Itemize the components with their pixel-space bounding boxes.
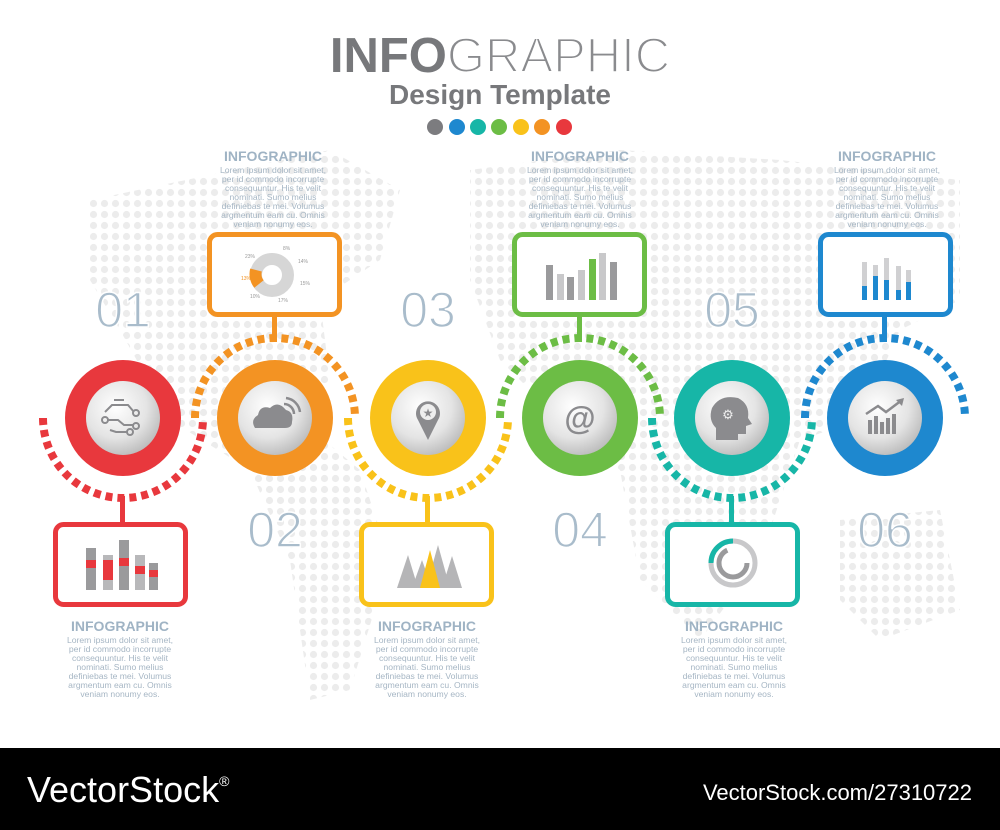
box 02: donut chart <box>210 234 340 314</box>
text block 06: nominati. Sumo melius <box>844 192 930 202</box>
text block 01: veniam nonumy eos. <box>80 689 160 699</box>
box 04: bar chart <box>514 234 644 314</box>
text block 02: consequuntur. His te velit <box>225 183 322 193</box>
text block 06: veniam nonumy eos. <box>847 219 927 229</box>
text block 02: definiebas te mei. Volumus <box>222 201 324 211</box>
step 01 <box>43 282 203 604</box>
icon: cloud <box>253 404 292 428</box>
text block 02 <box>220 148 326 229</box>
text block 03: per id commodo incorrupte <box>376 644 478 654</box>
icon: head with gears <box>711 397 752 440</box>
text block 01: nominati. Sumo melius <box>77 662 163 672</box>
title: INFOGRAPHIC <box>330 29 670 83</box>
text block 02: per id commodo incorrupte <box>222 174 324 184</box>
text block 03: consequuntur. His te velit <box>379 653 476 663</box>
box 02: donut chart: 23% <box>245 254 256 260</box>
icon: location star <box>416 401 440 440</box>
box 01: bar chart <box>56 524 186 604</box>
text block 04: INFOGRAPHIC <box>531 148 629 164</box>
step 03: ★ <box>423 406 433 420</box>
text block 05: argmentum eam cu. Omnis <box>682 680 786 690</box>
box 02: donut chart: 14% <box>298 259 309 265</box>
text block 02: veniam nonumy eos. <box>233 219 313 229</box>
text block 04: argmentum eam cu. Omnis <box>528 210 632 220</box>
number 03: 03 <box>400 282 456 338</box>
text block 04 <box>527 148 633 229</box>
text block 03: Lorem ipsum dolor sit amet, <box>374 635 480 645</box>
text block 01: INFOGRAPHIC <box>71 618 169 634</box>
box 02: donut chart: 15% <box>300 281 311 287</box>
circle 05 <box>674 360 790 476</box>
circle 03 <box>370 360 486 476</box>
text block 05 <box>681 618 787 699</box>
text block 05: per id commodo incorrupte <box>683 644 785 654</box>
number 02: 02 <box>247 502 303 558</box>
box 03: mountain chart <box>362 524 492 604</box>
step 03 <box>348 282 508 604</box>
circle 04 <box>522 360 638 476</box>
footer bar: VectorStock.com/27310722 <box>703 780 972 805</box>
circle 02 <box>217 360 333 476</box>
number 06: 06 <box>857 502 913 558</box>
text block 06: INFOGRAPHIC <box>838 148 936 164</box>
text block 05: Lorem ipsum dolor sit amet, <box>681 635 787 645</box>
text block 02: argmentum eam cu. Omnis <box>221 210 325 220</box>
circle 01 <box>65 360 181 476</box>
dashed arc 03 <box>348 418 508 498</box>
dashed arc 02 <box>195 338 355 418</box>
icon: circuit <box>102 400 139 435</box>
step 05 <box>652 282 812 699</box>
number 04: 04 <box>552 502 608 558</box>
text block 02: Lorem ipsum dolor sit amet, <box>220 165 326 175</box>
text block 01: consequuntur. His te velit <box>72 653 169 663</box>
text block 06: Lorem ipsum dolor sit amet, <box>834 165 940 175</box>
text block 03: nominati. Sumo melius <box>384 662 470 672</box>
text block 06: definiebas te mei. Volumus <box>836 201 938 211</box>
footer bar: ® <box>219 773 230 789</box>
icon: growth chart <box>868 414 896 434</box>
icon: at sign: @ <box>564 400 596 436</box>
step 06 <box>805 148 965 558</box>
text block 03: veniam nonumy eos. <box>387 689 467 699</box>
dashed arc 05 <box>652 418 812 498</box>
subtitle: Design Template <box>389 79 611 110</box>
text block 04: consequuntur. His te velit <box>532 183 629 193</box>
box 02: donut chart: 8% <box>283 246 291 252</box>
text block 04: per id commodo incorrupte <box>529 174 631 184</box>
box 06: bar chart <box>820 234 950 314</box>
text block 06: consequuntur. His te velit <box>839 183 936 193</box>
footer bar: VectorStock <box>27 769 219 810</box>
text block 04: veniam nonumy eos. <box>540 219 620 229</box>
number 01: 01 <box>95 282 151 338</box>
number 05: 05 <box>704 282 760 338</box>
box 02: donut chart: 13% <box>241 276 252 282</box>
background: dotted world map <box>90 150 960 700</box>
circle 06 <box>827 360 943 476</box>
text block 06 <box>834 148 940 229</box>
text block 03: INFOGRAPHIC <box>378 618 476 634</box>
dashed arc 04 <box>500 338 660 418</box>
box 02: donut chart: 17% <box>278 298 289 304</box>
step 02 <box>195 148 355 558</box>
box 05: ring chart <box>668 524 798 604</box>
text block 05: consequuntur. His te velit <box>686 653 783 663</box>
text block 04: nominati. Sumo melius <box>537 192 623 202</box>
text block 05: nominati. Sumo melius <box>691 662 777 672</box>
text block 02: INFOGRAPHIC <box>224 148 322 164</box>
text block 03: definiebas te mei. Volumus <box>376 671 478 681</box>
text block 06: argmentum eam cu. Omnis <box>835 210 939 220</box>
text block 04: Lorem ipsum dolor sit amet, <box>527 165 633 175</box>
step 05: ⚙ <box>722 407 734 422</box>
text block 01 <box>67 618 173 699</box>
text block 02: nominati. Sumo melius <box>230 192 316 202</box>
text block 04: definiebas te mei. Volumus <box>529 201 631 211</box>
text block 03: argmentum eam cu. Omnis <box>375 680 479 690</box>
text block 05: INFOGRAPHIC <box>685 618 783 634</box>
text block 01: per id commodo incorrupte <box>69 644 171 654</box>
text block 01: argmentum eam cu. Omnis <box>68 680 172 690</box>
dashed arc 06 <box>805 338 965 418</box>
step 04 <box>500 148 660 558</box>
text block 03 <box>374 618 480 699</box>
box 02: donut chart: 10% <box>250 294 261 300</box>
color dots <box>427 119 572 135</box>
dashed arc 01 <box>43 418 203 498</box>
text block 06: per id commodo incorrupte <box>836 174 938 184</box>
text block 05: definiebas te mei. Volumus <box>683 671 785 681</box>
text block 01: Lorem ipsum dolor sit amet, <box>67 635 173 645</box>
text block 01: definiebas te mei. Volumus <box>69 671 171 681</box>
text block 05: veniam nonumy eos. <box>694 689 774 699</box>
footer bar <box>0 748 1000 830</box>
